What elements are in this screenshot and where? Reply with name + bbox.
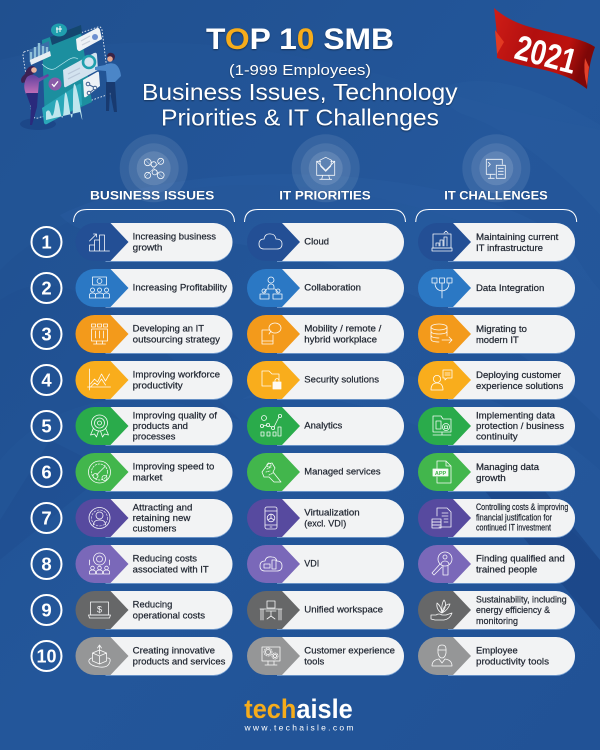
panel: business issues list <box>76 223 232 676</box>
item: unified workspace <box>247 591 404 630</box>
rank 1: 1 <box>41 232 52 253</box>
rank 9: 9 <box>41 600 52 621</box>
item: implementing data protection business continuity: protection / business <box>476 421 564 431</box>
item: reducing costs associated with it: Reducing costs <box>133 554 197 564</box>
item: increasing business growth: growth <box>133 242 162 252</box>
bracket <box>244 210 406 222</box>
man figure <box>95 53 121 112</box>
item: improving quality of products and processes: products and <box>133 421 188 431</box>
column header: business issues <box>74 134 234 222</box>
item: analytics <box>247 407 404 446</box>
item: employee productivity tools: Employee <box>476 646 518 656</box>
item: improving workforce productivity: productivity <box>133 380 183 390</box>
item: deploying customer experience solutions: Deploying customer <box>476 370 561 380</box>
item: managing data growth: growth <box>476 473 506 483</box>
item: reducing operational costs: operational costs <box>133 610 205 620</box>
item: sustainability energy efficiency and monitoring: monitoring <box>476 616 518 626</box>
year: 2021 <box>511 28 581 82</box>
item: sustainability energy efficiency and monitoring: energy efficiency & <box>476 605 550 615</box>
item: migrating to modern it: modern IT <box>476 335 519 345</box>
item: controlling costs and improving financial justification: continued IT investment <box>476 521 551 532</box>
website: www.techaisle.com <box>244 722 354 732</box>
panel: it challenges list <box>418 223 575 676</box>
rank 3 <box>32 319 62 349</box>
subheading: employees: (1-999 Employees) <box>229 63 371 79</box>
bracket <box>74 210 234 222</box>
item: attracting and retaining new customers: retaining new <box>133 513 191 523</box>
cloud tag <box>51 24 67 36</box>
floor shadow <box>20 118 56 130</box>
heading line 3: Priorities & IT Challenges <box>161 104 439 130</box>
item: migrating to modern it: Migrating to <box>476 324 527 334</box>
item: reducing operational costs: $ <box>97 604 102 614</box>
check badge <box>48 78 62 90</box>
rank 2: 2 <box>41 278 52 299</box>
item: migrating to modern it <box>418 315 575 354</box>
title <box>142 23 458 130</box>
item: attracting and retaining new customers: customers <box>133 523 177 533</box>
logo: techaisle <box>244 694 354 732</box>
item: virtualization excl vdi: (excl. VDI) <box>304 518 346 528</box>
rank 6 <box>32 457 62 487</box>
wave line <box>42 58 78 69</box>
teal dashboard panel <box>42 26 92 124</box>
item: finding qualified and trained people <box>418 545 575 584</box>
item: mobility remote hybrid workplace <box>247 315 404 354</box>
heading line 2: Business Issues, Technology <box>142 79 458 105</box>
item: security solutions: Security solutions <box>304 375 379 385</box>
rank 8 <box>32 549 62 579</box>
item: managing data growth: APP <box>435 471 446 477</box>
rank 5 <box>32 411 62 441</box>
halo icon <box>462 134 530 202</box>
item: improving workforce productivity <box>76 361 232 400</box>
column header: it challenges <box>416 134 577 222</box>
item: improving speed to market: Improving speed to <box>133 462 214 472</box>
item: security solutions <box>247 361 404 400</box>
halo icon <box>120 134 188 202</box>
item: data integration: Data Integration <box>476 283 544 293</box>
item: mobility remote hybrid workplace: Mobility / remote / <box>304 324 382 334</box>
rank 10: 10 <box>36 646 56 667</box>
item: cloud: Cloud <box>304 237 329 247</box>
item: managing data growth: Managing data <box>476 462 540 472</box>
rank 2 <box>32 273 62 303</box>
item: controlling costs and improving financial justification: financial justification for <box>476 511 552 522</box>
item: managed services <box>247 453 404 492</box>
item: reducing costs associated with it <box>76 545 232 584</box>
item: implementing data protection business continuity <box>418 407 575 446</box>
item: collaboration: Collaboration <box>304 283 361 293</box>
item: employee productivity tools <box>418 637 575 676</box>
item: developing an it outsourcing strategy: outsourcing strategy <box>133 334 220 344</box>
item: creating innovative products and services: Creating innovative <box>133 646 215 656</box>
rank 9 <box>32 595 62 625</box>
item: increasing business growth <box>76 223 232 262</box>
item: improving speed to market: market <box>133 472 163 482</box>
item: analytics: Analytics <box>304 421 343 431</box>
item: attracting and retaining new customers: Attracting and <box>133 502 192 512</box>
item: finding qualified and trained people: trained people <box>476 564 537 574</box>
item: unified workspace: Unified workspace <box>304 605 383 615</box>
item: developing an it outsourcing strategy: Developing an IT <box>133 324 204 334</box>
item: improving quality of products and processes: processes <box>133 431 176 441</box>
bracket <box>416 210 577 222</box>
item: managed services: Managed services <box>304 467 381 477</box>
rank 10 <box>32 641 62 671</box>
item: reducing operational costs: Reducing <box>133 600 172 610</box>
dotted frame <box>23 27 110 118</box>
wordmark: techaisle <box>244 694 353 724</box>
item: controlling costs and improving financial justification <box>418 499 575 538</box>
item: controlling costs and improving financial justification: Controlling costs & improving <box>476 501 568 512</box>
rank 3: 3 <box>41 324 52 345</box>
item: data integration <box>418 269 575 308</box>
rank 8: 8 <box>41 554 52 575</box>
heading: top 10 smb: TOP 10 SMB <box>206 23 394 56</box>
panel: it priorities list <box>247 223 404 676</box>
item: increasing business growth: Increasing business <box>133 232 216 242</box>
item: cloud <box>247 223 404 262</box>
area chart card <box>42 84 82 124</box>
item: implementing data protection business continuity: Implementing data <box>476 410 556 420</box>
item: increasing profitability <box>76 269 232 308</box>
item: virtualization excl vdi: Virtualization <box>304 508 360 518</box>
label: IT CHALLENGES <box>444 188 548 202</box>
item: improving quality of products and processes: Improving quality of <box>133 410 217 420</box>
item: implementing data protection business continuity: continuity <box>476 431 518 441</box>
item: virtualization excl vdi <box>247 499 404 538</box>
panel header bar <box>50 25 82 45</box>
illustration: analysts with dashboard <box>20 24 121 130</box>
rank numbers <box>32 227 62 671</box>
ring chart card <box>63 53 98 87</box>
label: IT PRIORITIES <box>279 188 371 202</box>
item: maintaining current it infrastructure: Maintaining current <box>476 232 559 242</box>
item: employee productivity tools: productivity tools <box>476 656 549 666</box>
item: maintaining current it infrastructure <box>418 223 575 262</box>
nodes card <box>83 72 100 97</box>
item: deploying customer experience solutions: experience solutions <box>476 381 564 391</box>
halo icon <box>292 134 360 202</box>
item: customer experience tools: tools <box>304 656 325 666</box>
rank 1 <box>32 227 62 257</box>
item: collaboration <box>247 269 404 308</box>
rank 7 <box>32 503 62 533</box>
item: reducing operational costs <box>76 591 232 630</box>
item: deploying customer experience solutions <box>418 361 575 400</box>
item: sustainability energy efficiency and monitoring: Sustainability, including <box>476 594 567 604</box>
item: improving workforce productivity: Improving workforce <box>133 370 220 380</box>
rank 4 <box>32 365 62 395</box>
item: improving speed to market <box>76 453 232 492</box>
woman figure <box>21 66 49 125</box>
rank 7: 7 <box>41 508 52 529</box>
rank 5: 5 <box>41 416 52 437</box>
item: increasing profitability: Increasing Profitability <box>133 283 227 293</box>
item: vdi: VDI <box>304 559 319 569</box>
item: developing an it outsourcing strategy <box>76 315 232 354</box>
item: mobility remote hybrid workplace: hybrid workplace <box>304 334 377 344</box>
item: sustainability energy efficiency and monitoring <box>418 591 575 630</box>
top right card <box>76 28 102 51</box>
item: managing data growth <box>418 453 575 492</box>
item: creating innovative products and services <box>76 637 232 676</box>
item: vdi <box>247 545 404 584</box>
item: reducing costs associated with it: associated with IT <box>133 564 209 574</box>
label: BUSINESS ISSUES <box>90 188 214 202</box>
rank 6: 6 <box>41 462 52 483</box>
item: customer experience tools: Customer experience <box>304 646 395 656</box>
rank 4: 4 <box>41 370 52 391</box>
ribbon: 2021 <box>494 8 595 89</box>
item: maintaining current it infrastructure: IT infrastructure <box>476 243 543 253</box>
item: customer experience tools <box>247 637 404 676</box>
item: attracting and retaining new customers <box>76 499 232 538</box>
item: creating innovative products and services: products and services <box>133 656 226 666</box>
column header: it priorities <box>244 134 406 222</box>
item: finding qualified and trained people: Finding qualified and <box>476 554 565 564</box>
bar chart card <box>29 41 51 65</box>
item: improving quality of products and processes <box>76 407 232 446</box>
